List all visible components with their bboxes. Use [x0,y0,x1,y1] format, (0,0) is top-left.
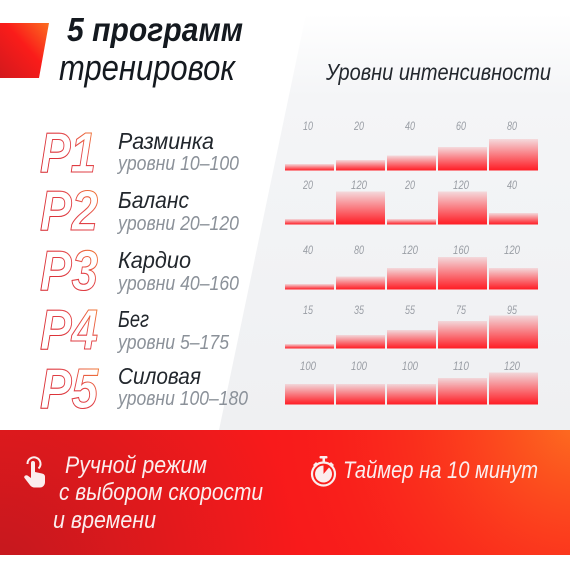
program list [40,121,248,421]
program P4 [40,298,230,362]
program P5: Силовая [118,363,201,389]
row P5 bars [285,359,538,404]
program P4: P4 [40,298,98,362]
program P2: уровни 20–120 [116,213,239,235]
row P1 bars: 20 [353,119,364,133]
program P3: уровни 40–160 [116,273,239,295]
row P5 bars: 120 [504,359,520,373]
row P4 bars: 35 [354,303,364,317]
row P5 bars: 100 [351,359,367,373]
program P3 [40,239,239,303]
title line 2: тренировок [59,47,237,88]
row P2 bars [285,178,538,224]
bar chart: intensity levels [285,119,538,404]
program P3: Кардио [118,247,191,273]
row P4 bars [285,303,538,348]
row P3 bars: 160 [453,243,469,257]
row P3 bars: 80 [354,243,364,257]
row P2 bars: 120 [351,178,367,192]
row P5 bars: 110 [453,359,469,373]
manual mode text: с выбором скорости [59,479,263,506]
row P3 bars: 40 [303,243,313,257]
manual mode text: и времени [53,507,156,534]
row P1 bars [285,119,538,170]
timer text: Таймер на 10 минут [343,457,538,484]
row P1 bars: 80 [507,119,517,133]
grey background panel [219,14,570,430]
program P1 [40,121,239,185]
row P4 bars: 55 [405,303,415,317]
program P1: Разминка [118,128,214,154]
program P2: P2 [40,179,98,243]
row P5 bars: 100 [300,359,316,373]
title block [0,11,243,88]
icon: touch hand [24,457,45,488]
program P2 [40,179,239,243]
row P4 bars: 75 [456,303,466,317]
row P1 bars: 60 [456,119,466,133]
program P3: P3 [40,239,98,303]
row P4 bars: 15 [303,303,313,317]
row P2 bars: 20 [404,178,415,192]
row P2 bars: 40 [507,178,517,192]
row P1 bars: 10 [303,119,313,133]
program P4: уровни 5–175 [116,332,230,354]
icon: stopwatch [312,456,335,486]
program P4: Бег [118,306,149,332]
row P2 bars: 20 [302,178,313,192]
program P5 [40,357,248,421]
program P5: уровни 100–180 [116,388,248,410]
manual mode text: Ручной режим [65,452,207,479]
row P1 bars: 40 [405,119,415,133]
row P3 bars [285,243,538,290]
row P5 bars: 100 [402,359,418,373]
row P3 bars: 120 [504,243,520,257]
red accent parallelogram [0,23,49,78]
manual mode text [53,452,263,534]
title line 1: 5 программ [67,11,243,48]
program P2: Баланс [118,187,189,213]
row P4 bars: 95 [507,303,517,317]
row P2 bars: 120 [453,178,469,192]
bottom red band [0,430,570,555]
program P5: P5 [40,357,99,421]
program P1: P1 [40,121,96,185]
row P3 bars: 120 [402,243,418,257]
program P1: уровни 10–100 [116,153,239,175]
